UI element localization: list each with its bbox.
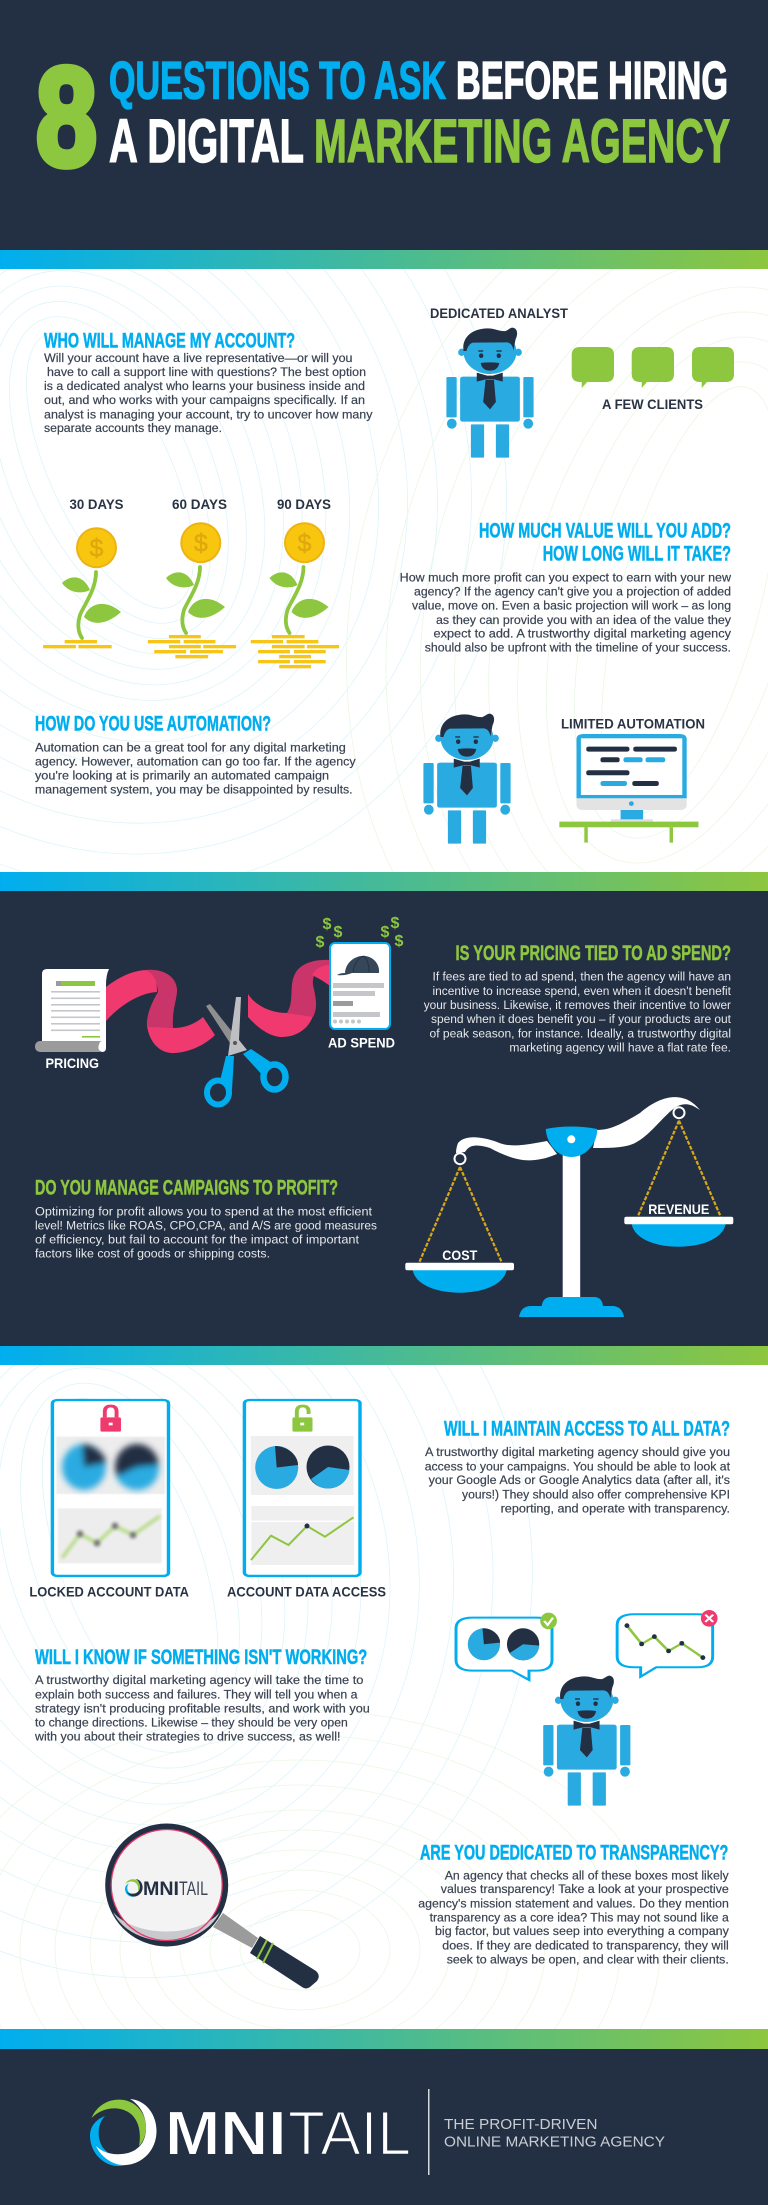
icon: analyst character (446, 328, 534, 458)
icon: plant 90 days (270, 567, 328, 633)
heading: WHO WILL MANAGE MY ACCOUNT? (44, 330, 295, 352)
icon: failure speech bubble with declining line (617, 1610, 718, 1677)
chart: money plants by days (43, 497, 339, 668)
body text: analyst is managing your account, try to uncover how many (44, 408, 373, 422)
body text (424, 970, 732, 1055)
body text: out, and who works with your campaigns specifically. If an (44, 393, 365, 407)
body text: Optimizing for profit allows you to spend at the most efficient (35, 1204, 373, 1218)
header panel (0, 0, 768, 250)
body text (44, 351, 373, 435)
omnitail logo: MNI (165, 2100, 286, 2168)
omnitail logo (90, 2099, 411, 2168)
body text: explain both success and failures. They will tell you when a (35, 1687, 358, 1701)
label: cost: COST (442, 1248, 478, 1263)
body text (418, 1868, 730, 1967)
body text: does. If they are dedicated to transparency, they will (442, 1938, 729, 1952)
hanging rings (454, 1107, 684, 1164)
question: who will manage my account (44, 330, 373, 435)
tagline (444, 2117, 665, 2151)
icon: monitor on desk (559, 734, 698, 843)
body text: of peak season, for instance. Ideally, a trustworthy digital (430, 1026, 731, 1040)
label: 30 days: 30 DAYS (70, 497, 124, 512)
panel: account data access card (244, 1400, 360, 1576)
body text: yours!) They should also offer comprehensive KPI (462, 1487, 730, 1501)
body text: separate accounts they manage. (44, 421, 222, 435)
label: account data access: ACCOUNT DATA ACCESS (227, 1585, 386, 1600)
body text: marketing agency will have a flat rate fee. (509, 1041, 731, 1055)
body text: agency. However, automation can go too far. If the agency (35, 755, 356, 769)
body text (400, 570, 732, 655)
body text: you're looking at is primarily an automated campaign (35, 769, 329, 783)
icon: dollar signs: $ (323, 916, 332, 933)
body text: your Google Ads or Google Analytics data (after all, it's (429, 1473, 730, 1487)
icon: automation character (423, 714, 511, 844)
body text: A trustworthy digital marketing agency will take the time to (35, 1673, 364, 1687)
icon: three client speech bubbles (572, 347, 734, 388)
body text: A trustworthy digital marketing agency should give you (425, 1445, 730, 1459)
body text: expect to add. A trustworthy digital marketing agency (434, 626, 732, 640)
icon: coin 30 days (76, 527, 117, 568)
body text: reporting, and operate with transparency. (501, 1502, 730, 1516)
body text: big factor, but values seep into everything a company (435, 1924, 730, 1938)
body text: agency's mission statement and values. Do they mention (418, 1896, 729, 1910)
gradient band 2 (0, 872, 768, 891)
title line 2 (109, 107, 730, 175)
big number 8: 8 (36, 38, 97, 195)
body text: strategy isn't producing profitable results, and work with you (35, 1702, 370, 1716)
footer panel (0, 2049, 768, 2205)
icon: coin 60 days: $ (194, 530, 208, 558)
omnitail logo: TAIL (288, 2100, 411, 2168)
label: 60 days: 60 DAYS (172, 497, 227, 512)
icon: stacked coin bars (43, 635, 339, 668)
gradient band 4 (0, 2029, 768, 2049)
question: is your pricing tied to ad spend (424, 942, 732, 1055)
icon: plant 30 days (62, 572, 121, 638)
label: pricing: PRICING (46, 1056, 99, 1071)
question: will i know if something isn't working (34, 1646, 370, 1744)
icon: coin 90 days: $ (298, 530, 312, 558)
body text (34, 1673, 370, 1744)
body text: spend when it does benefit you – if your products are out (431, 1012, 732, 1026)
label: revenue: REVENUE (648, 1202, 709, 1217)
question: how much value will you add (400, 520, 732, 655)
body text (425, 1445, 731, 1516)
right pan (624, 1217, 733, 1247)
label: dedicated analyst: DEDICATED ANALYST (430, 306, 569, 321)
body text: to change directions. Likewise – they should be very open (35, 1716, 348, 1730)
body text: with you about their strategies to drive success, as well! (34, 1730, 340, 1744)
body text: If fees are tied to ad spend, then the agency will have an (432, 970, 731, 984)
body text: transparency as a core idea? This may not sound like a (430, 1911, 729, 1925)
icon: dollar signs: $ (381, 924, 390, 941)
gradient band 3 (0, 1346, 768, 1365)
label: 90 days: 90 DAYS (277, 497, 331, 512)
icon: ad spend card (330, 943, 390, 1029)
body text: factors like cost of goods or shipping costs. (35, 1247, 270, 1261)
label: ad spend: AD SPEND (328, 1036, 395, 1051)
question: will i maintain access to all data (425, 1418, 731, 1516)
body text: should also be upfront with the timeline of your success. (425, 641, 731, 655)
body text: Will your account have a live representative—or will you (44, 351, 353, 365)
pillar (563, 1150, 580, 1300)
body text: incentive to increase spend, even when it doesn't benefit (432, 984, 732, 998)
section 1 background contour lines (0, 269, 768, 872)
body text: your business. Likewise, it removes their incentive to lower (424, 998, 731, 1012)
icon: dollar signs: $ (316, 934, 325, 951)
heading: HOW DO YOU USE AUTOMATION? (35, 713, 271, 736)
icon: dollar signs: $ (334, 924, 343, 941)
chains (419, 1121, 721, 1262)
body text: values transparency! Take a look at your prospective (441, 1882, 729, 1896)
icon: success speech bubble with pies (456, 1613, 557, 1680)
title line 2: A DIGITAL (109, 107, 304, 175)
icon: plant 60 days (166, 567, 225, 633)
body text: is a dedicated analyst who learns your business inside and (44, 379, 365, 393)
body text: level! Metrics like ROAS, CPO,CPA, and A/S are good measures (35, 1218, 377, 1232)
left pan (405, 1263, 514, 1293)
heading: WILL I KNOW IF SOMETHING ISN'T WORKING? (35, 1646, 367, 1669)
beam (456, 1097, 700, 1160)
body text: An agency that checks all of these boxes most likely (445, 1868, 729, 1882)
icon: coin 90 days (284, 522, 325, 563)
icon: balance scale (405, 1097, 733, 1317)
tagline: THE PROFIT-DRIVEN (444, 2117, 598, 2133)
icon: scissors (206, 997, 286, 1104)
tagline: ONLINE MARKETING AGENCY (444, 2135, 665, 2151)
icon: reporting character (543, 1676, 630, 1806)
icon: magnifying glass with logo (108, 1826, 319, 1988)
divider (428, 2089, 430, 2175)
base (519, 1297, 624, 1317)
body text: of efficiency, but fail to account for the impact of important (35, 1232, 360, 1246)
body text: have to call a support line with questions? The best option (47, 365, 366, 379)
line chart (251, 1517, 354, 1560)
icon: coin 30 days: $ (90, 534, 104, 562)
pie charts (255, 1446, 350, 1489)
body text (35, 741, 356, 797)
title line 1: QUESTIONS TO ASK (109, 52, 446, 110)
dark section panel (0, 891, 768, 1346)
icon: dollar signs: $ (395, 933, 404, 950)
gradient band 1 (0, 250, 768, 269)
question: are you dedicated to transparency (418, 1841, 730, 1967)
body text: seek to always be open, and clear with their clients. (447, 1953, 729, 1967)
label: a few clients: A FEW CLIENTS (602, 397, 703, 412)
body text: Automation can be a great tool for any digital marketing (35, 741, 346, 755)
logo inside lens (125, 1879, 208, 1900)
icon: pricing document (35, 969, 109, 1052)
body text (35, 1204, 377, 1261)
body text: access to your campaigns. You should be able to look at (425, 1459, 731, 1473)
logo inside lens: MNI (143, 1879, 179, 1900)
body text: agency? If the agency can't give you a projection of added (414, 584, 731, 598)
label: limited automation: LIMITED AUTOMATION (561, 716, 705, 731)
section 3 background contour lines (0, 1365, 660, 2029)
question: do you manage campaigns to profit (35, 1176, 377, 1261)
icon: cut ribbon (106, 960, 330, 1053)
pivot hub (546, 1126, 597, 1157)
label: locked account data: LOCKED ACCOUNT DATA (29, 1585, 189, 1600)
icon: dollar signs: $ (391, 915, 400, 932)
logo inside lens: TAIL (179, 1879, 208, 1900)
icon: coin 60 days (180, 522, 221, 563)
body text: as they can provide you with an idea of the value they (436, 613, 732, 627)
icon: dollar signs (316, 915, 404, 951)
question: how do you use automation (35, 713, 356, 797)
heading: DO YOU MANAGE CAMPAIGNS TO PROFIT? (35, 1176, 338, 1199)
body text: How much more profit can you expect to earn with your new (400, 570, 731, 584)
panel: locked account data card (52, 1400, 168, 1576)
body text: value, move on. Even a basic projection will work – as long (412, 598, 731, 612)
body text: management system, you may be disappointed by results. (35, 783, 353, 797)
